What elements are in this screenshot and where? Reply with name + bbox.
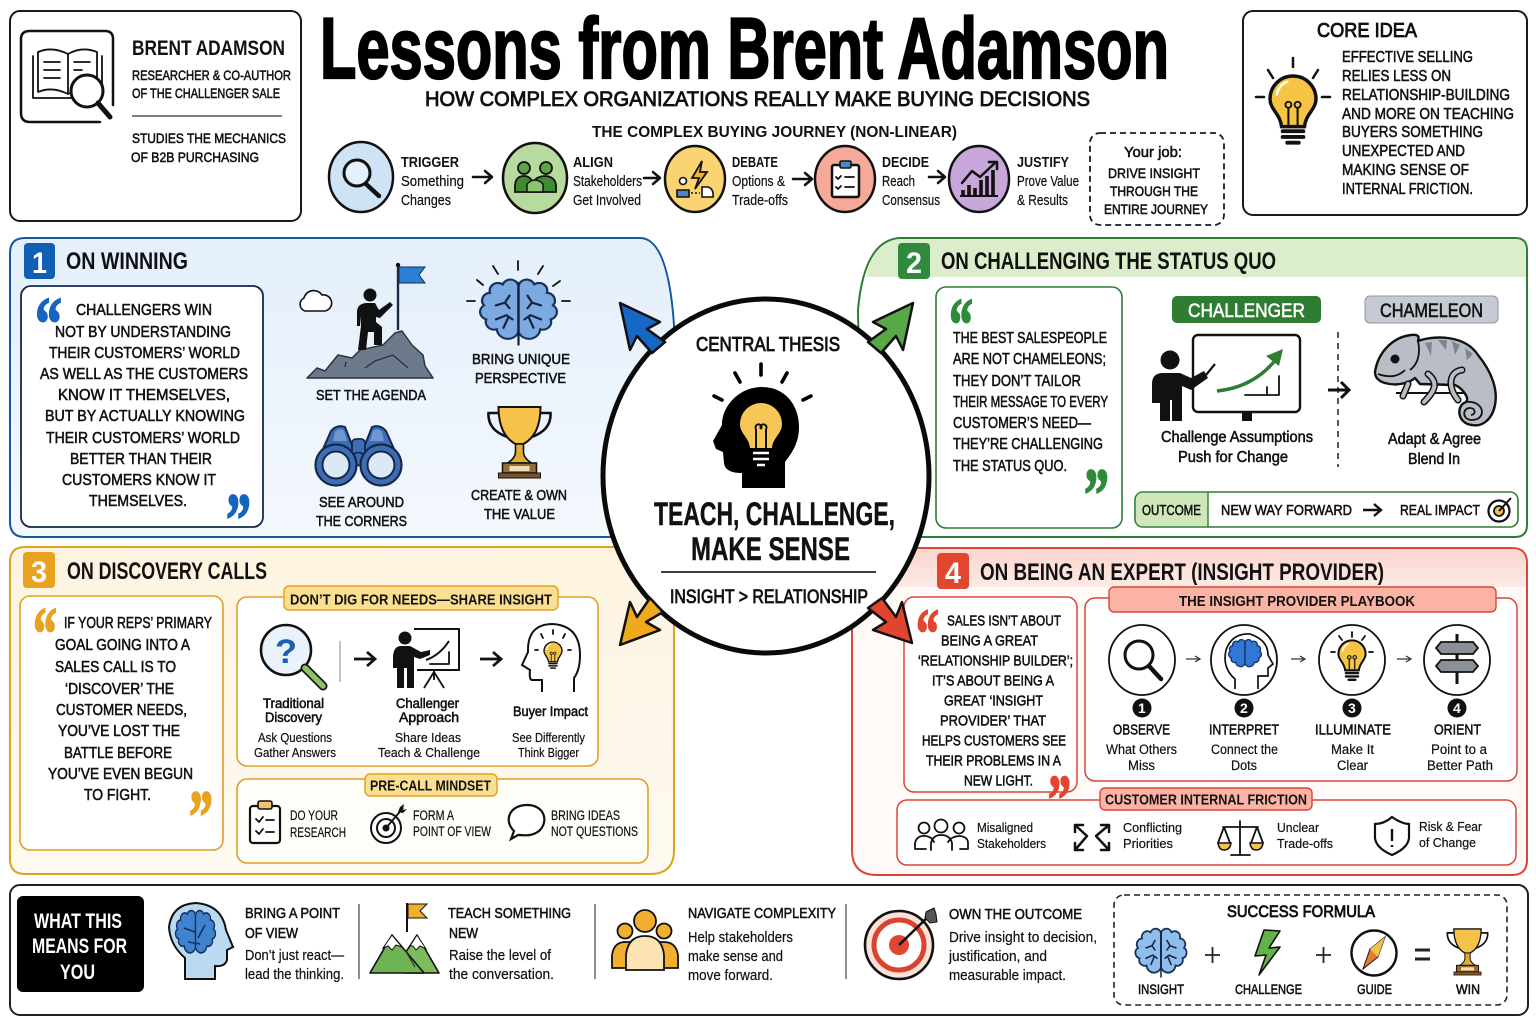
step 2: interpret: 2 (1240, 700, 1248, 716)
callout: what this means: MEANS FOR (32, 935, 127, 958)
quote: challengers win: THEIR CUSTOMERS’ WORLD (49, 345, 240, 362)
text: bring a point of view: Don’t just react— (245, 948, 344, 964)
quote: challengers win: THEIR CUSTOMERS’ WORLD (46, 430, 240, 447)
text: DO YOUR (290, 808, 338, 823)
box: customer internal friction (897, 788, 1516, 865)
icon: trigger magnifier (329, 142, 393, 212)
icon: red arrow to panel 4 (868, 598, 912, 643)
outcome bar (1135, 492, 1518, 527)
quote: sales isn't about (904, 596, 1077, 839)
quote: challengers win: BUT BY ACTUALLY KNOWING (45, 408, 245, 425)
label: DON’T DIG FOR NEEDS—SHARE INSIGHT (290, 592, 552, 608)
quote: discover needs: YOU’VE LOST THE (58, 723, 180, 740)
heading: central thesis: CENTRAL THESIS (696, 334, 840, 356)
text: debate: Options & (732, 174, 785, 190)
step 1: observe: 1 (1138, 700, 1146, 716)
text (551, 808, 638, 839)
text: own the outcome: Drive insight to decision, (949, 930, 1097, 946)
step 2: interpret (1209, 625, 1279, 773)
text: challenger approach: Teach & Challenge (378, 745, 480, 760)
quote: challengers win: NOT BY UNDERSTANDING (55, 324, 231, 341)
arrow (473, 171, 492, 183)
text: teach something new: the conversation. (449, 967, 554, 983)
quote: challengers win: ” (226, 479, 251, 562)
text: navigate complexity: make sense and (688, 949, 783, 965)
text: teach something new: TEACH SOMETHING (448, 905, 571, 922)
step 1: observe: OBSERVE (1113, 722, 1170, 738)
subtitle: HOW COMPLEX ORGANIZATIONS REALLY MAKE BUYING DECISIONS (425, 88, 1090, 111)
text: teach something new: NEW (449, 925, 479, 942)
badge: 2 (898, 243, 930, 280)
quote: best salespeople: THE STATUS QUO. (953, 458, 1067, 475)
label: Challenge Assumptions (1161, 429, 1313, 446)
label (1161, 429, 1313, 466)
text: challenger approach: Share Ideas (395, 730, 461, 745)
heading: buying journey: THE COMPLEX BUYING JOURNEY (NON-LINEAR) (592, 124, 957, 141)
outcome bar: NEW WAY FORWARD (1221, 502, 1352, 519)
callout: your job: ENTIRE JOURNEY (1104, 201, 1209, 217)
label: Adapt & Agree (1388, 431, 1481, 448)
text: bring a point of view: BRING A POINT (245, 905, 340, 922)
arrow (929, 171, 945, 183)
label: chameleon: CHAMELEON (1380, 301, 1483, 322)
text: debate (732, 154, 788, 209)
quote: best salespeople: “ (949, 284, 973, 367)
quote: best salespeople: CUSTOMER’S NEED— (953, 415, 1091, 432)
icon: head with brain (169, 903, 233, 979)
quote: best salespeople: THEIR MESSAGE TO EVERY (953, 394, 1108, 411)
text: BRING IDEAS (551, 808, 620, 823)
text: core idea body: RELATIONSHIP-BUILDING (1342, 87, 1510, 104)
quote: discover needs: ‘DISCOVER’ THE (65, 681, 174, 698)
quote: discover needs (20, 593, 223, 859)
step 4: orient: 4 (1453, 700, 1461, 716)
quote: sales isn't about: “ (916, 596, 939, 673)
quote: discover needs: BATTLE BEFORE (64, 745, 172, 762)
icon: trophy win (1447, 929, 1488, 975)
text: core idea body: RELIES LESS ON (1342, 68, 1451, 85)
text: justify: JUSTIFY (1017, 154, 1069, 171)
text: buyer impact: Think Bigger (518, 745, 580, 760)
step 4: orient: Better Path (1427, 758, 1493, 773)
quote: challengers win: AS WELL AS THE CUSTOMERS (40, 366, 248, 383)
label: Blend In (1408, 451, 1460, 468)
text: justify: & Results (1017, 193, 1068, 209)
icon: presenter at board (1152, 335, 1300, 421)
step 4: orient: Point to a (1431, 742, 1487, 757)
icon: debate (665, 146, 725, 212)
quote: discover needs: IF YOUR REPS’ PRIMARY (64, 615, 212, 632)
text (1277, 820, 1333, 851)
text (977, 820, 1046, 851)
icon: light bulb (1256, 58, 1330, 143)
flow: buying journey steps (329, 142, 1079, 213)
icon: head with idea (522, 624, 580, 692)
icon: trophy (488, 407, 551, 478)
step 2: interpret: Dots (1231, 758, 1257, 773)
icon: compass (1352, 930, 1396, 976)
badge: 1 (24, 243, 55, 280)
step 3: illuminate (1315, 625, 1391, 773)
icon: question magnifier (261, 625, 323, 686)
text: navigate complexity: move forward. (688, 968, 773, 984)
quote: challengers win: CUSTOMERS KNOW IT (62, 472, 216, 489)
icon: binoculars (316, 426, 402, 486)
label: chameleon (1365, 296, 1498, 323)
text: challenger approach: Approach (399, 710, 459, 725)
quote: best salespeople: THE BEST SALESPEOPLE (953, 330, 1107, 347)
step 1: observe (1106, 625, 1177, 773)
text: Risk & Fear (1419, 819, 1483, 834)
icon: climber on mountain (300, 263, 433, 378)
panel: 4 on being an expert (852, 548, 1527, 875)
icon: conflicting arrows (1075, 825, 1109, 850)
text: decide: DECIDE (882, 154, 929, 171)
box: success formula (1114, 895, 1507, 1005)
quote: sales isn't about: HELPS CUSTOMERS SEE (922, 734, 1066, 750)
symbol: equals (1415, 950, 1430, 959)
text: author role (132, 67, 291, 101)
text: of Change (1419, 835, 1476, 850)
quote: sales isn't about: PROVIDER’ THAT (940, 714, 1046, 730)
quote: sales isn't about: IT’S ABOUT BEING A (932, 674, 1054, 690)
icon: align stakeholders (503, 143, 567, 213)
panel: 2 on challenging the status quo (858, 238, 1527, 537)
quote: sales isn't about: GREAT ‘INSIGHT (944, 694, 1043, 710)
quote: discover needs: SALES CALL IS TO (55, 659, 176, 676)
title: Lessons from Brent Adamson (320, 1, 1169, 97)
panel: what this means for you (10, 885, 1528, 1015)
text: NOT QUESTIONS (551, 824, 638, 839)
callout: what this means: YOU (60, 961, 95, 984)
text: decide (882, 154, 940, 209)
heading: on winning: ON WINNING (66, 248, 188, 275)
labels: formula: GUIDE (1357, 981, 1392, 997)
text (1419, 819, 1483, 850)
text: POINT OF VIEW (413, 824, 491, 839)
heading: on being an expert: ON BEING AN EXPERT (INSIGHT PROVIDER) (980, 559, 1384, 586)
text: navigate complexity (688, 905, 836, 984)
arrow (1186, 656, 1200, 662)
text: challenger approach: Challenger (396, 696, 459, 711)
text: trigger (401, 154, 464, 209)
step 2: interpret: Connect the (1211, 742, 1278, 757)
icon: group of people (612, 910, 678, 970)
quote: best salespeople: ARE NOT CHAMELEONS; (953, 351, 1106, 368)
quote: challengers win: “ (35, 283, 62, 366)
text (413, 808, 491, 839)
box: pre-call mindset (237, 774, 648, 863)
text: navigate complexity: NAVIGATE COMPLEXITY (688, 905, 836, 922)
quote: sales isn't about: ” (1048, 762, 1071, 839)
text: author focus: OF B2B PURCHASING (131, 149, 259, 165)
quote: discover needs: ” (189, 776, 213, 859)
icon: blue arrow to panel 1 (620, 303, 665, 353)
quote: sales isn't about: NEW LIGHT. (964, 774, 1033, 790)
icon: glowing brain (467, 261, 570, 345)
badge: 3: 3 (31, 556, 47, 589)
label: THE INSIGHT PROVIDER PLAYBOOK (1179, 594, 1415, 610)
arrow (354, 652, 375, 666)
text: core idea body: INTERNAL FRICTION. (1342, 181, 1473, 198)
text: author role: OF THE CHALLENGER SALE (132, 85, 280, 101)
panel: 3 on discovery calls (10, 547, 674, 874)
arrow (1397, 656, 1411, 662)
text: thesis statement (654, 496, 895, 567)
text: debate: DEBATE (732, 154, 778, 171)
quote: sales isn't about: BEING A GREAT (941, 634, 1038, 650)
label (1388, 431, 1481, 468)
quote: sales isn't about: THEIR PROBLEMS IN A (926, 754, 1061, 770)
labels: formula: INSIGHT (1138, 981, 1184, 997)
text: own the outcome: measurable impact. (949, 968, 1066, 984)
text: Trade-offs (1277, 836, 1333, 851)
label: CREATE & OWN (471, 487, 567, 504)
label: SET THE AGENDA (316, 388, 426, 404)
text: RESEARCH (290, 825, 346, 840)
label: THE VALUE (484, 506, 555, 523)
step 1: observe: Miss (1128, 758, 1155, 773)
text: core idea body: EFFECTIVE SELLING (1342, 49, 1473, 66)
text: buyer impact: See Differently (512, 730, 585, 745)
text: trigger: TRIGGER (401, 154, 459, 171)
badge: 4: 4 (945, 557, 961, 590)
badge: 1: 1 (32, 247, 47, 280)
text: traditional discovery (254, 696, 336, 760)
text: navigate complexity: Help stakeholders (688, 930, 793, 946)
step 4: orient: ORIENT (1434, 722, 1481, 738)
callout: your job: Your job: (1124, 145, 1182, 161)
label (1109, 587, 1496, 612)
arrow (644, 172, 660, 184)
text: core idea body: BUYERS SOMETHING (1342, 124, 1483, 141)
text: trigger: Changes (401, 193, 451, 209)
panel: author (10, 11, 301, 221)
text: author name: BRENT ADAMSON (132, 37, 285, 60)
heading: on discovery calls: ON DISCOVERY CALLS (67, 558, 267, 585)
step 3: illuminate: Clear (1337, 758, 1368, 773)
panel: central thesis (603, 299, 929, 653)
text: author focus: STUDIES THE MECHANICS (132, 130, 286, 146)
quote: challengers win: CHALLENGERS WIN (76, 302, 212, 319)
badge: 2: 2 (906, 247, 922, 280)
label: PERSPECTIVE (475, 370, 566, 387)
arrow (793, 173, 812, 185)
label (284, 586, 558, 610)
icon: speech bubble (509, 805, 544, 839)
step 3: illuminate: ILLUMINATE (1315, 722, 1391, 738)
quote: discover needs: “ (33, 593, 57, 676)
text: justify: Prove Value (1017, 174, 1079, 190)
text: bring a point of view: OF VIEW (245, 925, 299, 942)
label (316, 494, 407, 530)
text (290, 808, 346, 840)
text: Misaligned (977, 820, 1033, 835)
heading: SUCCESS FORMULA (1227, 902, 1376, 921)
text: Stakeholders (977, 836, 1046, 851)
text: author role: RESEARCHER & CO-AUTHOR (132, 67, 291, 83)
text: bring a point of view (245, 905, 344, 983)
panel: core idea (1243, 11, 1527, 215)
text: align: Get Involved (573, 193, 641, 209)
quote: sales isn't about: SALES ISN’T ABOUT (947, 614, 1061, 630)
label: challenger (1172, 296, 1321, 323)
text: justify (1017, 154, 1079, 209)
text: decide: Consensus (882, 193, 940, 209)
badge: 4 (937, 553, 969, 590)
quote: best salespeople (936, 284, 1122, 537)
text: thesis statement: MAKE SENSE (691, 531, 850, 567)
callout: what this means: WHAT THIS (34, 910, 122, 933)
icon: lightning bolt (1255, 930, 1280, 975)
arrow (480, 652, 501, 666)
quote: challengers win: BETTER THAN THEIR (70, 451, 212, 468)
text: buyer impact: Buyer Impact (513, 704, 588, 719)
callout: your job (1090, 133, 1224, 225)
text: challenger approach (378, 696, 480, 760)
label: CUSTOMER INTERNAL FRICTION (1105, 792, 1307, 808)
text: Priorities (1123, 836, 1173, 851)
outcome bar: REAL IMPACT (1400, 502, 1480, 519)
text: own the outcome (948, 906, 1097, 984)
text: insight over relationship: INSIGHT > RELATIONSHIP (670, 587, 868, 608)
heading: on challenging the status quo: ON CHALLENGING THE STATUS QUO (941, 248, 1276, 275)
label: BRING UNIQUE (472, 351, 570, 368)
text: traditional discovery: Traditional (263, 696, 324, 711)
text: own the outcome: justification, and (948, 949, 1047, 965)
outcome bar: OUTCOME (1142, 502, 1201, 519)
text: Conflicting (1123, 820, 1182, 835)
icon: scale (1218, 821, 1263, 855)
text: core idea body: MAKING SENSE OF (1342, 162, 1469, 179)
quote: discover needs: TO FIGHT. (84, 787, 151, 804)
icon: head with light bulb (713, 364, 811, 488)
quote: discover needs: GOAL GOING INTO A (55, 637, 191, 654)
callout: your job: DRIVE INSIGHT (1108, 165, 1200, 181)
arrow (1328, 382, 1349, 398)
step 3: illuminate: Make It (1331, 742, 1374, 757)
icon: book with magnifier (21, 31, 113, 122)
icon: presenter (393, 629, 459, 688)
icon: question magnifier: ? (275, 633, 297, 671)
quote: challengers win: KNOW IT THEMSELVES, (58, 387, 230, 404)
symbol: plus (1205, 947, 1220, 963)
label (472, 351, 570, 387)
heading: core idea: CORE IDEA (1317, 20, 1418, 42)
label: PRE-CALL MINDSET (370, 778, 491, 794)
step 1: observe: What Others (1106, 742, 1177, 757)
text: bring a point of view: lead the thinking. (245, 967, 344, 983)
box: share insight (237, 586, 598, 766)
quote: challengers win: THEMSELVES. (89, 493, 187, 510)
text: trigger: Something (401, 174, 464, 190)
step 2: interpret: INTERPRET (1209, 722, 1279, 738)
label: Push for Change (1178, 449, 1288, 466)
icon: orange arrow to panel 3 (620, 598, 663, 645)
icon: misaligned stakeholders (915, 820, 968, 850)
text: core idea body: UNEXPECTED AND (1342, 143, 1465, 160)
quote: best salespeople: THEY’RE CHALLENGING (953, 436, 1103, 453)
text: debate: Trade-offs (732, 193, 788, 209)
text: buyer impact (512, 704, 588, 760)
label (1100, 788, 1312, 810)
icon: green arrow to panel 2 (868, 303, 913, 353)
text: align (573, 154, 642, 209)
text: teach something new: Raise the level of (449, 948, 552, 964)
callout: your job: THROUGH THE (1110, 183, 1198, 199)
text: author focus (131, 130, 286, 165)
step 3: illuminate: 3 (1348, 700, 1356, 716)
label: THE CORNERS (316, 513, 407, 530)
quote: best salespeople: THEY DON’T TAILOR (953, 373, 1081, 390)
step 4: orient (1424, 625, 1493, 773)
symbol: plus (1316, 947, 1331, 963)
icon: chameleon (1375, 335, 1496, 425)
text: traditional discovery: Ask Questions (258, 730, 332, 745)
label: challenger: CHALLENGER (1188, 301, 1305, 322)
text: teach something new (448, 905, 571, 983)
icon: warning shield (1375, 817, 1409, 855)
arrow (1291, 656, 1305, 662)
text: Unclear (1277, 820, 1320, 835)
panel: 1 on winning (10, 238, 675, 562)
icon: decide clipboard (815, 146, 875, 212)
label: SEE AROUND (319, 494, 404, 511)
text (1123, 820, 1182, 851)
quote: challengers win (21, 283, 263, 562)
icon: flag and mountains (370, 903, 439, 973)
text: thesis statement: TEACH, CHALLENGE, (654, 496, 895, 532)
text: FORM A (413, 808, 454, 823)
quote: discover needs: CUSTOMER NEEDS, (56, 702, 187, 719)
labels: formula: WIN (1456, 981, 1480, 997)
box: insight provider playbook (1085, 587, 1517, 781)
labels: formula: CHALLENGE (1235, 981, 1302, 997)
badge: 3 (23, 552, 55, 589)
text: own the outcome: OWN THE OUTCOME (949, 906, 1082, 923)
icon: target with arrow (865, 908, 937, 979)
icon: checklist (250, 801, 280, 843)
text: traditional discovery: Gather Answers (254, 745, 336, 760)
icon: brain insight (1135, 929, 1187, 977)
icon: justify chart (949, 146, 1009, 212)
labels: formula (1138, 981, 1480, 997)
text: align: ALIGN (573, 154, 613, 171)
callout: what this means (17, 896, 144, 992)
label (471, 487, 567, 523)
quote: discover needs: YOU’VE EVEN BEGUN (48, 766, 193, 783)
text: decide: Reach (882, 174, 915, 190)
text: align: Stakeholders (573, 174, 642, 190)
text: traditional discovery: Discovery (265, 710, 322, 725)
quote: best salespeople: ” (1084, 454, 1109, 537)
quote: sales isn't about: ‘RELATIONSHIP BUILDER’; (918, 654, 1073, 670)
icon: target (371, 804, 407, 843)
text: core idea body: AND MORE ON TEACHING (1342, 106, 1514, 123)
label (365, 774, 497, 796)
text: core idea body (1342, 49, 1514, 198)
